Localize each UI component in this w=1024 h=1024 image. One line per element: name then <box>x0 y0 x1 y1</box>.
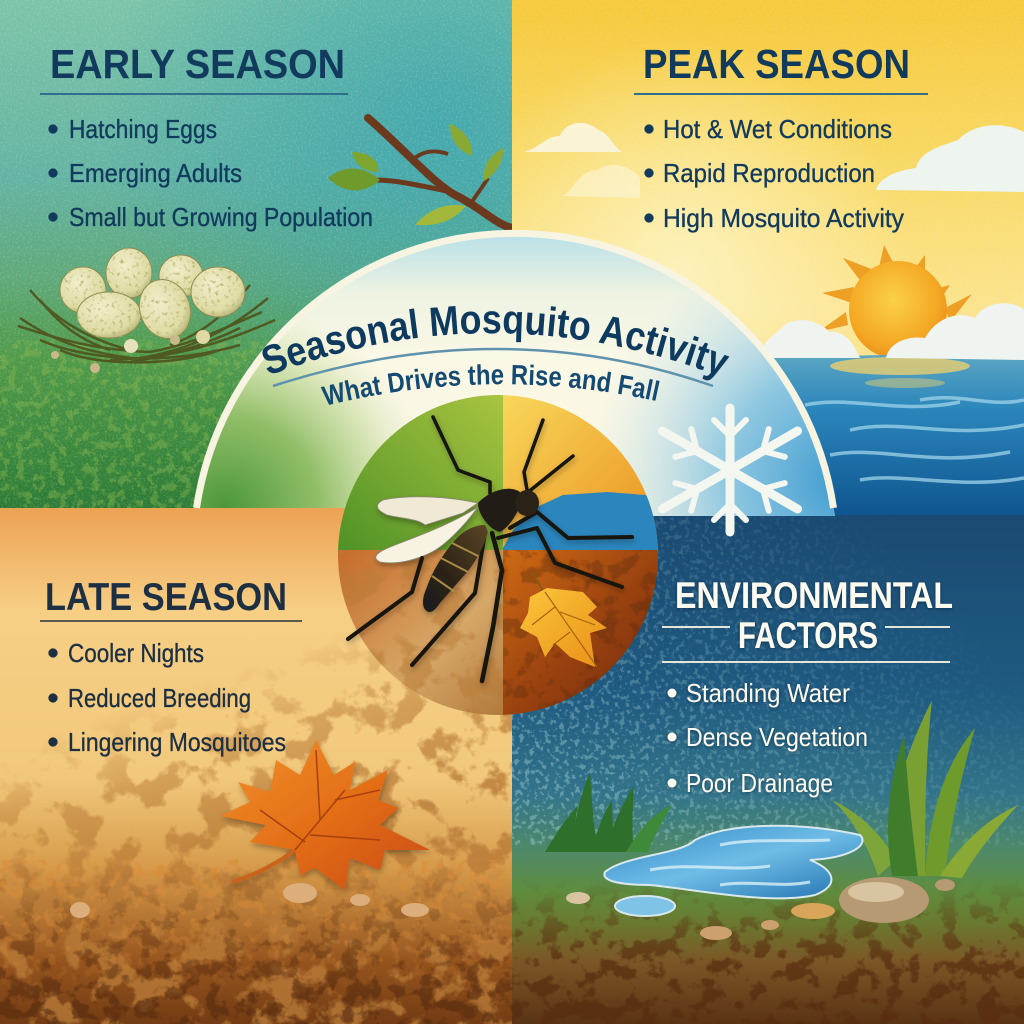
icon: maple leaf <box>220 740 430 890</box>
icon: sun <box>818 245 972 359</box>
early season bullets: Small but Growing Population <box>69 202 373 232</box>
icon: snowflake <box>654 408 806 532</box>
late season bullets: Cooler Nights <box>68 638 204 668</box>
thorax <box>478 489 521 532</box>
peak season bullets: Rapid Reproduction <box>663 158 875 188</box>
head <box>515 490 539 516</box>
early season bullets: Emerging Adults <box>69 158 242 188</box>
heading: environmental factors <box>675 575 953 656</box>
panel: central arc <box>193 230 837 536</box>
icon: large cloud <box>876 125 1024 192</box>
icon: yellow leaf <box>520 573 607 667</box>
wings <box>376 497 478 563</box>
rocks <box>70 883 429 918</box>
subtitle: What Drives the Rise and Fall <box>320 364 660 405</box>
late season background <box>0 508 512 1024</box>
heading: late season: LATE SEASON <box>45 576 287 619</box>
abdomen <box>423 525 488 612</box>
icon: nest with eggs <box>18 248 275 373</box>
icon: rocks <box>566 877 955 940</box>
early season bullets: Hatching Eggs <box>69 114 217 144</box>
panel: early season <box>0 0 512 510</box>
heading: peak season: PEAK SEASON <box>643 41 910 87</box>
panel: environmental factors <box>512 515 1024 1024</box>
legs <box>348 417 632 681</box>
icon: small clouds <box>524 123 640 198</box>
heading: early season: EARLY SEASON <box>50 41 345 87</box>
arc background <box>190 230 840 520</box>
central seasonal circle <box>338 395 663 715</box>
late season bullets: Reduced Breeding <box>68 683 251 713</box>
late season bullets: Lingering Mosquitoes <box>68 727 286 757</box>
peak season bullets: Hot & Wet Conditions <box>663 114 892 144</box>
icon: small grass <box>545 772 672 852</box>
environmental bullets: Dense Vegetation <box>686 722 868 752</box>
early season background <box>0 0 512 510</box>
icon: large grass <box>832 700 1018 878</box>
early season bullets <box>48 114 373 232</box>
environmental bullets: Standing Water <box>686 678 850 708</box>
icon: mosquito <box>348 417 632 681</box>
environmental bullets <box>668 678 868 798</box>
peak season bullets: High Mosquito Activity <box>663 203 904 233</box>
icon: clouds over sea <box>760 303 1024 360</box>
heading: environmental factors: FACTORS <box>738 615 878 656</box>
icon: sea <box>750 352 1024 515</box>
environmental background <box>512 515 1024 1024</box>
panel: peak season <box>512 0 1024 515</box>
peak season background <box>512 0 1024 515</box>
title: Seasonal Mosquito Activity <box>262 306 730 380</box>
heading: environmental factors: ENVIRONMENTAL <box>675 575 953 616</box>
late season bullets <box>48 638 286 757</box>
icon: branch with leaves <box>328 118 512 228</box>
environmental bullets: Poor Drainage <box>686 768 833 798</box>
icon: puddle <box>604 826 863 916</box>
peak season bullets <box>644 114 904 233</box>
panel: late season <box>0 508 512 1024</box>
